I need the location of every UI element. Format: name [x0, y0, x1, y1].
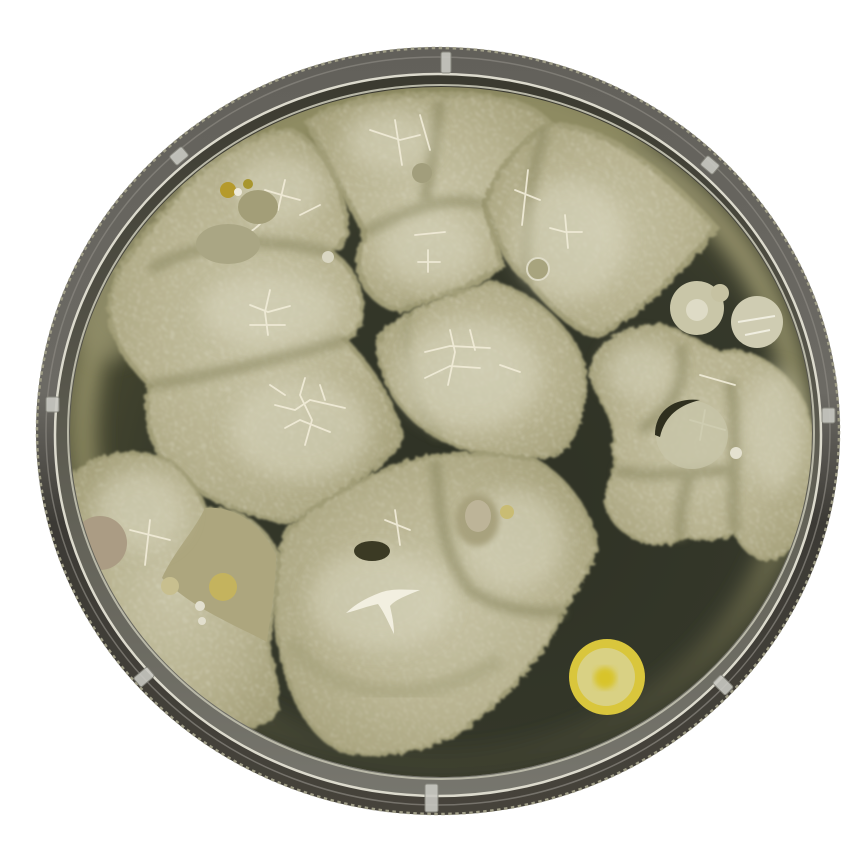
colony: left large	[110, 130, 402, 522]
lobes in top-left colony	[73, 163, 549, 570]
raised knob on bottom colony	[455, 494, 499, 546]
yellow colony	[569, 639, 645, 715]
agar plate	[65, 80, 815, 777]
colony: center	[378, 282, 585, 458]
dark crescent in right cluster	[655, 400, 728, 469]
white wrinkle marks	[130, 115, 735, 565]
colony: bottom center	[275, 454, 597, 754]
colony: right cluster	[590, 325, 815, 560]
icon: white star mark on bottom colony	[346, 590, 420, 634]
dark hole in bottom colony	[354, 541, 390, 561]
small round colonies	[161, 179, 783, 625]
colony: bottom left	[73, 453, 278, 727]
colony: top right	[485, 125, 716, 336]
pale concentric zones	[95, 110, 805, 650]
colony shading seams	[150, 100, 740, 612]
dark olive wash on lower colony skirt	[290, 640, 500, 692]
colony: top middle	[308, 94, 548, 310]
tan patch in bottom left colony	[162, 508, 276, 642]
